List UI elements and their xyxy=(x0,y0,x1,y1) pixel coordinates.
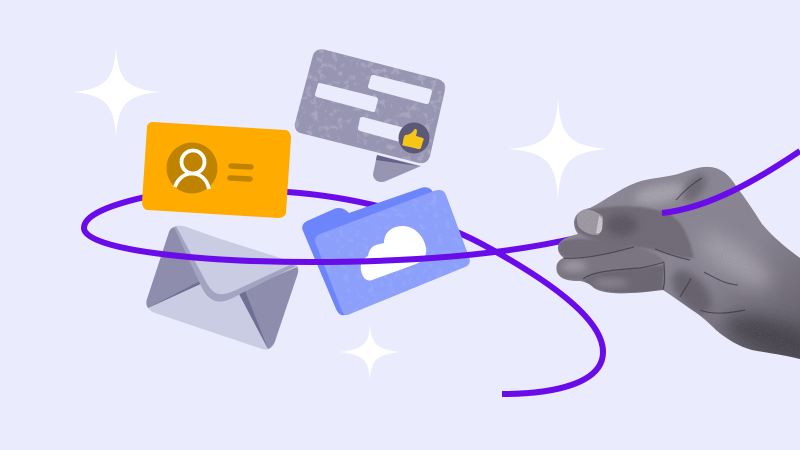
message bar one xyxy=(315,83,378,112)
purple line: front section xyxy=(84,228,580,262)
message bar three xyxy=(358,117,405,142)
index finger knuckle highlight xyxy=(634,182,684,206)
palm shadow xyxy=(670,268,714,316)
bubble tail xyxy=(373,155,421,182)
purple line: through hand xyxy=(662,151,800,213)
knuckle crease shadow xyxy=(680,172,708,204)
illustration xyxy=(74,49,800,397)
avatar circle xyxy=(166,142,218,194)
message bar two xyxy=(368,75,432,104)
hand xyxy=(556,166,800,359)
thumb knuckle shadow xyxy=(606,214,638,236)
sparkle: top left xyxy=(72,47,160,137)
envelope fold shadows xyxy=(148,279,268,349)
folder xyxy=(302,187,470,315)
envelope right fold xyxy=(238,267,298,349)
wrist shadow xyxy=(718,306,800,359)
envelope base xyxy=(147,226,298,350)
finger creases xyxy=(563,178,745,313)
envelope flap xyxy=(174,226,296,302)
lower fingers xyxy=(556,247,664,280)
card lines xyxy=(230,166,251,179)
hand silhouette xyxy=(556,167,800,359)
back of hand highlight xyxy=(699,231,774,292)
card body xyxy=(142,122,291,218)
sparkle: bottom xyxy=(340,323,400,381)
cloud xyxy=(361,226,426,280)
folder back xyxy=(302,187,468,315)
contact card xyxy=(142,122,291,218)
skin grain xyxy=(565,167,800,358)
purple line: back section xyxy=(84,189,603,394)
thumb xyxy=(575,206,694,258)
chat bubble xyxy=(295,49,445,182)
folder front xyxy=(315,190,470,315)
thumbs up badge xyxy=(398,122,430,154)
sparkle: right xyxy=(508,98,608,200)
bubble body xyxy=(295,49,445,163)
envelope left fold xyxy=(146,227,204,308)
envelope xyxy=(146,226,298,350)
avatar person xyxy=(175,150,209,189)
thumb nail xyxy=(577,209,603,235)
